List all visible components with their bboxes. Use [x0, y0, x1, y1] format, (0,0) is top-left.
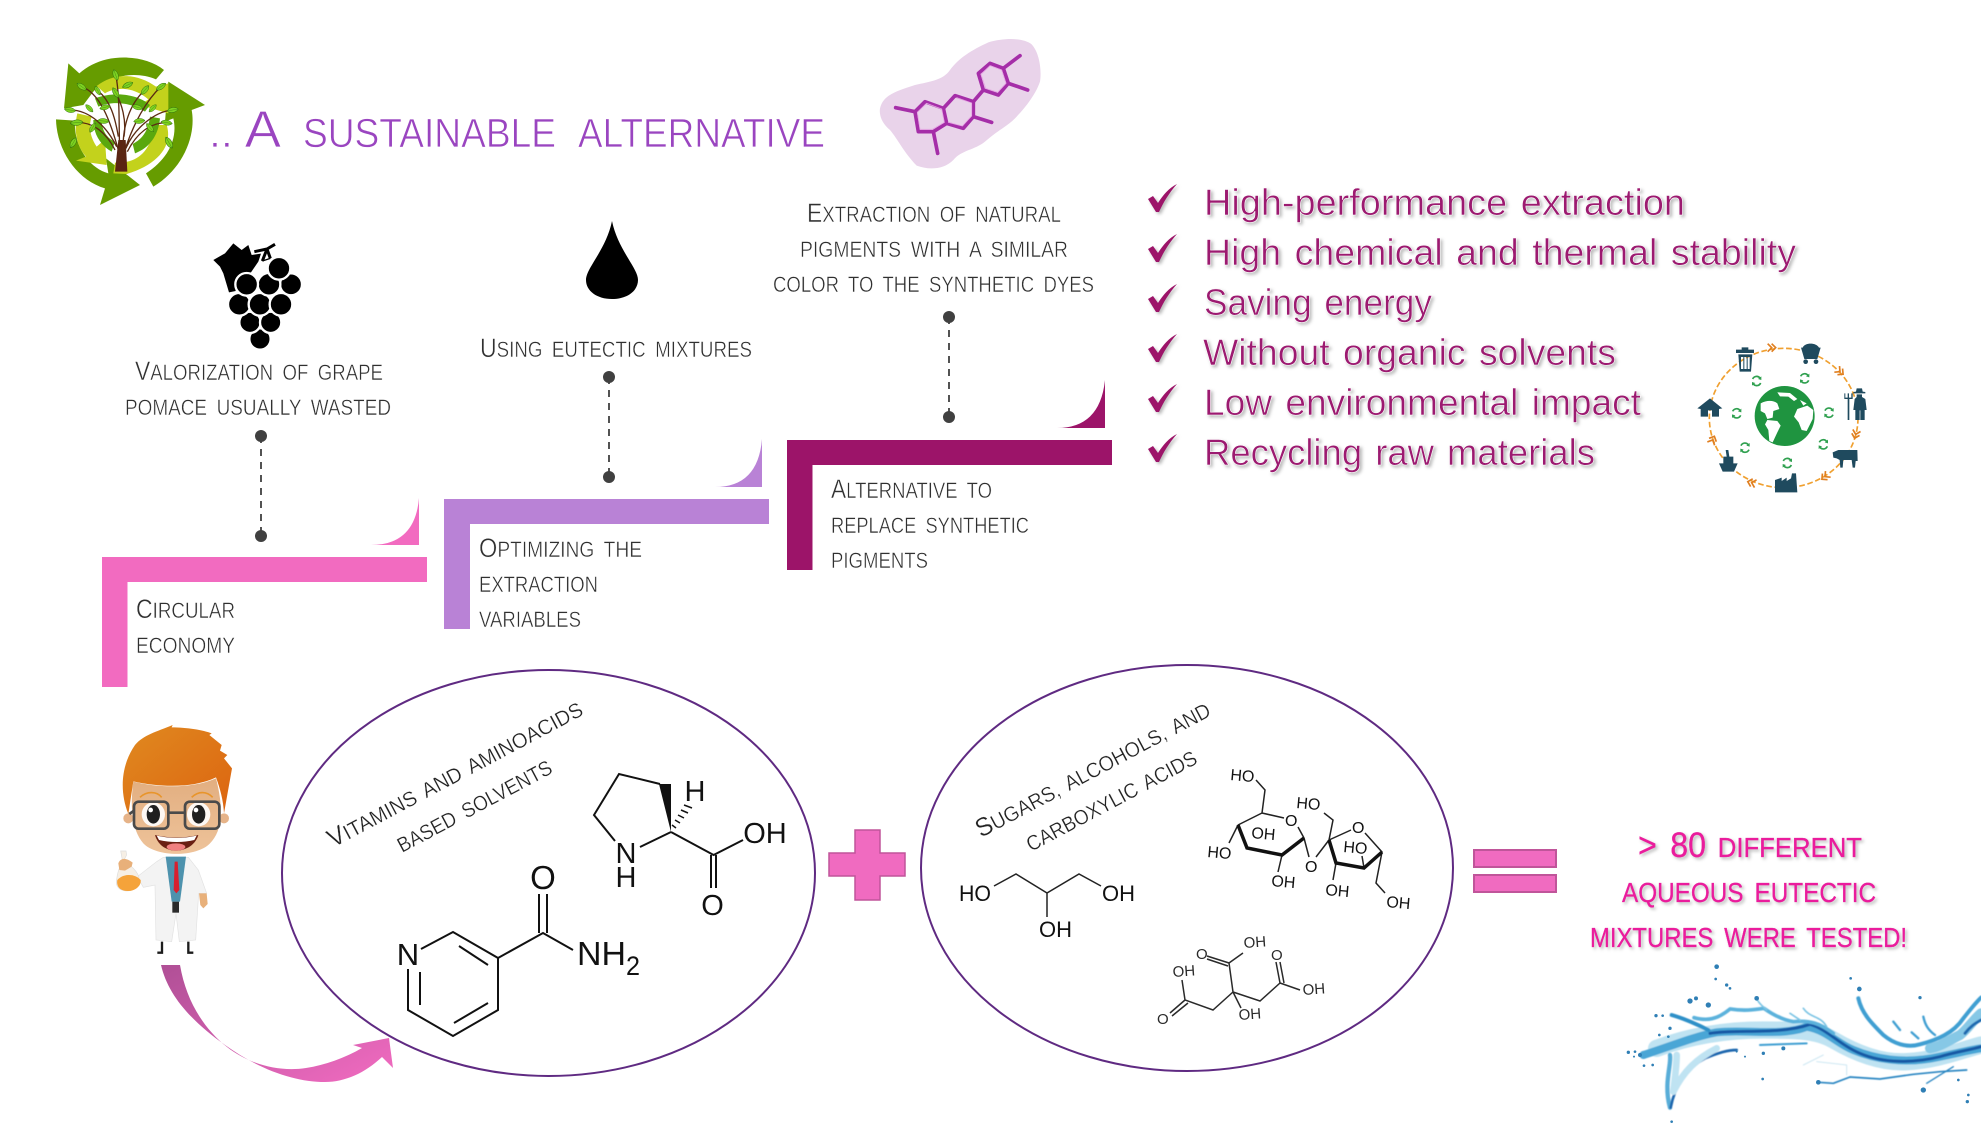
text: circular economy [136, 594, 235, 658]
molecule: sucrose: O [1285, 813, 1297, 830]
molecule: sucrose: HO [1230, 767, 1255, 786]
text: extraction of natural pigments: PIGMENTS WITH A SIMILAR [800, 237, 1068, 262]
molecule: sucrose: OH [1271, 873, 1296, 892]
molecule: citric acid: O [1157, 1011, 1169, 1028]
list text [1203, 182, 1796, 473]
molecule: citric acid: OH [1243, 933, 1267, 952]
legs [157, 942, 193, 953]
molecule: sucrose: HO [1343, 839, 1368, 858]
list text: Without organic solvents [1203, 332, 1616, 373]
icons: check marks [1148, 184, 1177, 462]
molecule: glycerol: HO [959, 881, 991, 906]
molecule: citric acid: O [1271, 947, 1283, 964]
molecule: proline [594, 774, 787, 922]
molecule: sucrose: HO [1296, 795, 1321, 814]
icon: recycling tree logo [56, 58, 205, 205]
icon: pigment molecule with glow [880, 39, 1041, 168]
list text: High-performance extraction [1204, 182, 1685, 223]
label: sugars, alcohols, and carboxylic acids: SUGARS, ALCOHOLS, AND [970, 694, 1215, 843]
text: alternative to replace synthetic pigments [831, 474, 1029, 573]
molecule: citric acid: O [1196, 946, 1208, 963]
shirt and tie [166, 857, 186, 902]
corner: magenta [1057, 380, 1105, 428]
text: result, more than 80 mixtures: > 80 DIFFERENT [1638, 826, 1862, 865]
molecule: citric acid: OH [1238, 1005, 1262, 1024]
molecule: sucrose [1207, 767, 1411, 913]
molecule: proline: N [616, 838, 636, 870]
connector: natural pigments to alternative [943, 311, 955, 423]
list text: High chemical and thermal stability [1204, 232, 1796, 273]
molecule: nicotinamide: 2 [626, 951, 640, 981]
mouth [155, 835, 198, 851]
icon: circular economy globe [1697, 344, 1867, 492]
glasses and eyes [142, 802, 165, 826]
bracket: alternative [787, 440, 1112, 570]
icon: scientist character [116, 725, 232, 953]
title: ALTERNATIVE [578, 110, 825, 156]
corner: purple [715, 439, 762, 487]
text: optimizing the extraction variables: EXTRACTION [479, 572, 598, 597]
list text: Recycling raw materials [1204, 432, 1595, 473]
molecule: citric acid: OH [1172, 962, 1196, 981]
icon: equals sign [1474, 850, 1556, 892]
molecule: sucrose: OH [1325, 882, 1350, 901]
molecule: proline: H [616, 862, 636, 894]
illustration: water splash [1627, 964, 1981, 1123]
molecule: nicotinamide: N [397, 937, 419, 972]
icon: grapes [213, 243, 302, 350]
panel: vitamins and aminoacids based solvents [282, 670, 815, 1076]
molecule: proline: OH [743, 818, 787, 850]
molecule: citric acid [1157, 933, 1326, 1028]
text: result, more than 80 mixtures [1590, 826, 1907, 953]
text: extraction of natural pigments: COLOR TO THE SYNTHETIC DYES [773, 272, 1094, 297]
molecule: nicotinamide: NH [577, 935, 626, 972]
text: circular economy: ECONOMY [136, 633, 235, 658]
text: extraction of natural pigments: EXTRACTION OF NATURAL [807, 198, 1061, 228]
text: extraction of natural pigments [773, 198, 1094, 297]
label: vitamins and aminoacids: VITAMINS AND AMINOACIDS [322, 693, 587, 853]
list text: Low environmental impact [1204, 382, 1642, 423]
title: SUSTAINABLE [303, 110, 556, 156]
molecule: glycerol: OH [1039, 917, 1072, 942]
title [209, 101, 825, 159]
panel: sugars, alcohols and carboxylic acids [921, 665, 1453, 1071]
text: optimizing the extraction variables [479, 533, 642, 632]
corner: pink [371, 498, 419, 545]
connector: grape text to circular economy [255, 430, 267, 542]
title: .. A [209, 101, 281, 159]
molecule: sucrose: OH [1251, 825, 1276, 844]
molecule: sucrose: O [1305, 859, 1317, 876]
checklist: benefits [1148, 182, 1796, 473]
text: alternative to replace synthetic pigments: ALTERNATIVE TO [831, 474, 992, 504]
eyebrows [140, 793, 213, 797]
ears [123, 813, 133, 823]
bracket: optimizing [444, 499, 769, 629]
hair [123, 725, 232, 814]
bracket: circular economy [102, 557, 427, 687]
label: vitamins and aminoacids: BASED SOLVENTS [394, 756, 556, 857]
connector: eutectic mixtures to optimizing [603, 371, 615, 483]
icon: drop [586, 221, 638, 299]
molecule: nicotinamide [397, 859, 640, 1036]
text: valorization of grape pomace: VALORIZATION OF GRAPE [135, 356, 383, 386]
right hand [199, 893, 208, 908]
text: optimizing the extraction variables: OPTIMIZING THE [479, 533, 642, 563]
molecule: sucrose: OH [1386, 894, 1411, 913]
molecule: proline: O [701, 890, 724, 922]
molecule: citric acid: OH [1302, 980, 1326, 999]
molecule: proline: H [685, 776, 705, 808]
text: result, more than 80 mixtures: MIXTURES WERE TESTED! [1590, 922, 1907, 953]
arrow: scientist to solvents [161, 965, 393, 1082]
face [132, 778, 221, 854]
icon: plus sign [829, 830, 905, 900]
text: optimizing the extraction variables: VARIABLES [479, 607, 581, 632]
molecule: glycerol: OH [1102, 881, 1135, 906]
text: using eutectic mixtures: USING EUTECTIC MIXTURES [480, 333, 752, 363]
molecule: sucrose: O [1352, 820, 1364, 837]
molecule: glycerol [959, 874, 1135, 942]
text: circular economy: CIRCULAR [136, 594, 235, 624]
list text: Saving energy [1204, 282, 1432, 323]
molecule: nicotinamide: O [530, 859, 556, 896]
label: sugars, alcohols, and carboxylic acids: CARBOXYLIC ACIDS [1023, 747, 1201, 856]
text: alternative to replace synthetic pigments: PIGMENTS [831, 548, 928, 573]
molecule: sucrose: HO [1207, 844, 1232, 863]
text: valorization of grape pomace [125, 356, 391, 420]
flask [116, 851, 139, 891]
text: valorization of grape pomace: POMACE USUALLY WASTED [125, 395, 391, 420]
text: alternative to replace synthetic pigments: REPLACE SYNTHETIC [831, 513, 1029, 538]
lab coat [137, 857, 207, 942]
text: result, more than 80 mixtures: AQUEOUS EUTECTIC [1622, 877, 1876, 908]
